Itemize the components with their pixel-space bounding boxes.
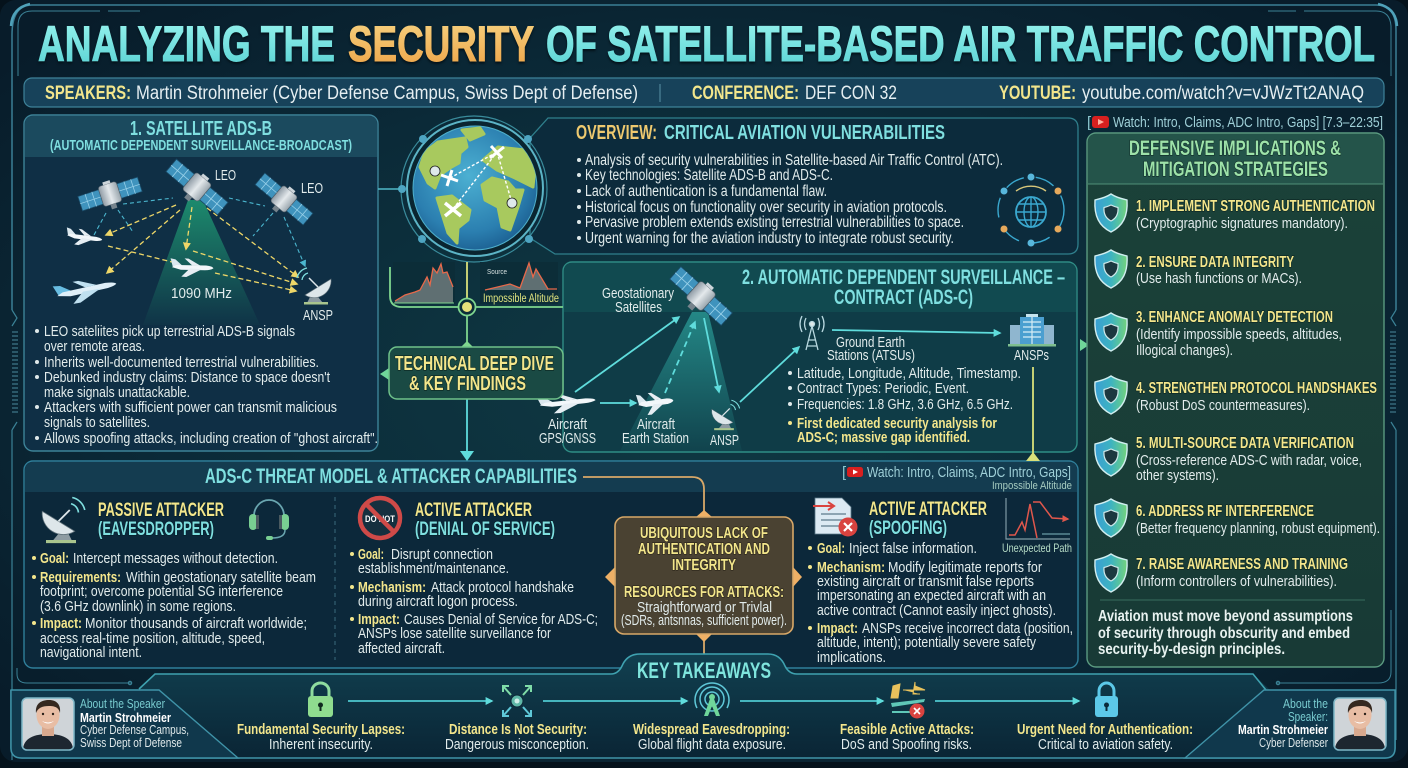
label: aircraft earth station: Aircraft [637, 417, 675, 433]
takeaway: widespread eavesdropping [633, 683, 790, 753]
mini chart: altitude spikes [393, 262, 455, 304]
chart: unexpected path [1002, 498, 1072, 555]
heading: active attacker DoS: ACTIVE ATTACKER [415, 500, 532, 521]
icon: ANSP dish [712, 400, 740, 430]
callout: technical deep dive [380, 341, 563, 399]
panel: 2 ADS-C [536, 262, 1077, 452]
panel: 1 satellite ADS-B [24, 115, 378, 451]
text: satellite ADS-B bullets: Attackers with sufficient power can transmit malicious [44, 400, 337, 416]
label: geostationary satellites: Geostationary [602, 286, 675, 302]
text: DoS bullets: Causes Denial of Service for ADS-C; [404, 612, 598, 628]
item 5: multi-source verification: (Cross-reference ADS-C with radar, voice, [1136, 453, 1362, 469]
text: spoofing bullets: Mechanism: [817, 560, 885, 576]
callout: ubiquitous lack of authentication: (SDRs, antsnnas, sufficient power). [621, 613, 787, 629]
takeaway: fundamental security lapses: Inherent insecurity. [269, 736, 373, 753]
icon: plane upper [64, 227, 103, 249]
text: DoS bullets: Disrupt connection [391, 547, 493, 563]
text: passive attacker bullets [32, 551, 316, 661]
takeaway: fundamental security lapses: Fundamental Security Lapses: [237, 721, 405, 738]
text: overview bullets: Urgent warning for the aviation industry to integrate robust security. [585, 230, 954, 247]
text: speaker bio: Swiss Dept of Defense [80, 735, 182, 750]
label: LEO right: LEO [301, 181, 323, 197]
heading: active attacker spoofing: (SPOOFING) [869, 518, 947, 539]
column: spoofing [808, 464, 1073, 666]
callout: ubiquitous lack of authentication: Straightforward or Trivlal [637, 600, 772, 616]
heading: active attacker DoS: (DENIAL OF SERVICE) [415, 519, 555, 540]
takeaway: urgent need for authentication: Critical to aviation safety. [1038, 736, 1173, 753]
title: SECURITY [348, 16, 534, 72]
text: passive attacker bullets: Intercept messages without detection. [73, 551, 278, 567]
title: ANALYZING THE [38, 16, 335, 72]
text: satellite ADS-B bullets [35, 324, 378, 447]
item 1: strong authentication [1095, 194, 1375, 232]
callout: ubiquitous lack of authentication [605, 510, 802, 642]
label: ANSPs: ANSPs [1014, 348, 1049, 364]
takeaway: feasible active attacks: Feasible Active Attacks: [840, 721, 974, 738]
heading: defensive [1129, 137, 1341, 181]
icon: headset [249, 500, 289, 540]
panel: about the speaker left [11, 690, 238, 758]
heading: threat model: ADS-C THREAT MODEL & ATTACKER CAPABILITIES [205, 465, 577, 488]
icon: geostationary satellite [664, 262, 737, 332]
heading: key takeaways: KEY TAKEAWAYS [637, 658, 771, 683]
label: aircraft GPS: GPS/GNSS [539, 431, 596, 447]
takeaway: urgent need for authentication: Urgent Need for Authentication: [1017, 721, 1193, 738]
item 5: multi-source verification: other systems). [1136, 468, 1219, 484]
text: satellite ADS-B bullets: Allows spoofing attacks, including creation of "ghost aircraft". [44, 431, 378, 447]
chart: unexpected path: Unexpected Path [1002, 541, 1072, 555]
text: overview bullets: Lack of authentication is a fundamental flaw. [585, 183, 827, 200]
item 3: anomaly detection: Illogical changes). [1136, 343, 1233, 359]
item 3: anomaly detection: (Identify impossible speeds, altitudes, [1136, 327, 1342, 343]
icon: aircraft earth station [636, 391, 674, 416]
text: passive attacker bullets: Within geostationary satellite beam [126, 570, 316, 586]
text: spoofing bullets: impersonating an expected aircraft with an [817, 588, 1046, 604]
takeaway: fundamental security lapses [237, 683, 405, 753]
heading: defensive: MITIGATION STRATEGIES [1143, 158, 1328, 181]
text: passive attacker bullets: Requirements: [40, 570, 121, 586]
text: ADS-C bullets: ADS-C; massive gap identified. [797, 430, 970, 446]
panel: overview [530, 118, 1078, 254]
label: ground earth stations: Stations (ATSUs) [827, 348, 915, 364]
text: overview bullets: Pervasive problem extends existing terrestrial vulnerabilities to space. [585, 214, 964, 231]
heading: passive attacker: PASSIVE ATTACKER [98, 500, 224, 521]
icon: satellite dish [42, 498, 85, 543]
heading: ADS-C: 2. AUTOMATIC DEPENDENT SURVEILLANCE – [742, 266, 1065, 289]
label: ANSP: ANSP [303, 308, 333, 324]
icon: spoofed document [813, 498, 858, 536]
heading: overview: OVERVIEW: [576, 122, 657, 144]
takeaway: widespread eavesdropping: Widespread Eavesdropping: [633, 721, 790, 738]
item 7: awareness and training [1095, 554, 1348, 592]
item 7: awareness and training: (Inform controllers of vulnerabilities). [1136, 574, 1337, 590]
header info bar: CONFERENCE: [692, 83, 799, 104]
takeaway: distance is not security [445, 686, 589, 753]
item 4: protocol handshakes [1095, 376, 1377, 414]
text: spoofing bullets: existing aircraft or transmit false reports [817, 574, 1034, 590]
panel: defensive implications [1087, 133, 1384, 667]
icon: ANSPs building [1008, 314, 1056, 346]
takeaway: urgent need for authentication [1017, 683, 1193, 753]
text: satellite ADS-B bullets: Inherits well-documented terrestrial vulnerabilities. [44, 355, 319, 371]
text: spoofing bullets: Inject false information. [849, 541, 977, 557]
item 2: data integrity: 2. ENSURE DATA INTEGRITY [1136, 254, 1294, 271]
item 3: anomaly detection: 3. ENHANCE ANOMALY DETECTION [1136, 309, 1333, 326]
heading: satellite ADS-B [50, 118, 352, 154]
icon: plane lower [53, 274, 118, 307]
text: passive attacker bullets: footprint; overcome potential SG interference [40, 584, 283, 600]
panel: ADS-C threat model [24, 461, 1078, 668]
text: passive attacker bullets: access real-time position, altitude, speed, [40, 631, 265, 647]
mini chart: impossible altitude: Impossible Altitude [483, 293, 559, 305]
text: passive attacker bullets: navigational intent. [40, 645, 142, 661]
text: speaker bio: Speaker: [1288, 709, 1328, 724]
item 6: RF interference [1095, 499, 1380, 537]
heading: ADS-C: CONTRACT (ADS-C) [834, 286, 973, 309]
icon: ground tower [800, 316, 824, 350]
label: impossible altitude: Impossible Altitude [992, 480, 1072, 492]
header info bar: SPEAKERS: [45, 83, 131, 104]
band: key takeaways [11, 654, 1395, 758]
text: spoofing bullets: ANSPs receive incorrect data (position, [862, 621, 1073, 637]
text: speaker bio [1238, 696, 1329, 750]
text: satellite ADS-B bullets: signals to satellites. [44, 415, 150, 431]
heading: overview [576, 122, 945, 144]
text: overview bullets: Analysis of security vulnerabilities in Satellite-based Air Traffic Control (ATC). [585, 152, 1003, 169]
label: aircraft GPS: Aircraft [548, 417, 587, 433]
text: DoS bullets: Impact: [358, 612, 400, 628]
text: passive attacker bullets: Impact: [40, 616, 82, 632]
text: spoofing bullets: active contract (Cannot easily inject ghosts). [817, 603, 1056, 619]
heading: passive attacker: (EAVESDROPPER) [98, 519, 214, 540]
label: geostationary satellites: Satellites [615, 300, 662, 316]
text: satellite ADS-B bullets: over remote areas. [44, 339, 145, 355]
header info bar: DEF CON 32 [805, 83, 897, 104]
heading: passive attacker [98, 500, 224, 540]
text: speaker bio: Cyber Defenser [1259, 735, 1329, 750]
photo: speaker [22, 698, 74, 750]
text: satellite ADS-B bullets: LEO sateliites pick up terrestrial ADS-B signals [44, 324, 295, 340]
connector lines [378, 189, 1033, 656]
heading: overview: CRITICAL AVIATION VULNERABILITIES [664, 122, 945, 144]
text: speaker bio: About the [1283, 696, 1328, 711]
text: ADS-C bullets: First dedicated security analysis for [797, 416, 997, 432]
header info bar [24, 78, 1384, 107]
text: passive attacker bullets: (3.6 GHz downlink) in some regions. [40, 599, 236, 615]
diagram: LEO satellites to ANSP [53, 154, 333, 325]
item 5: multi-source verification [1095, 435, 1362, 484]
heading: active attacker spoofing: ACTIVE ATTACKER [869, 499, 987, 520]
text: speaker bio: Martin Strohmeier [80, 710, 171, 725]
icon: satellite right [250, 169, 317, 231]
icon: do not sign [360, 498, 400, 538]
text: satellite ADS-B bullets: Debunked industry claims: Distance to space doesn't [44, 370, 330, 386]
watch link: defensive: [ [1087, 114, 1092, 131]
icon: satellite left [76, 172, 145, 218]
label: ANSP: ANSP [710, 433, 739, 449]
takeaway: feasible active attacks [840, 682, 974, 753]
heading: satellite ADS-B: (AUTOMATIC DEPENDENT SURVEILLANCE-BROADCAST) [50, 138, 352, 154]
text: speaker bio: Cyber Defense Campus, [80, 722, 189, 737]
text: ADS-C bullets: Frequencies: 1.8 GHz, 3.6 GHz, 6.5 GHz. [797, 397, 1013, 413]
item 3: anomaly detection [1095, 309, 1342, 359]
header info bar: youtube.com/watch?v=vJWzTt2ANAQ [1082, 83, 1364, 104]
text: overview bullets: Historical focus on functionality over security in aviation protocols. [585, 199, 947, 216]
arrow: down to threat model [460, 451, 474, 461]
watch link: [ [842, 464, 847, 481]
text: spoofing bullets [808, 541, 1073, 666]
text: closing statement [1098, 608, 1353, 658]
item 2: data integrity [1095, 250, 1302, 288]
icon: network globe [998, 174, 1064, 246]
label: ground earth stations [827, 335, 915, 364]
callout: ubiquitous lack of authentication: AUTHENTICATION AND [638, 541, 770, 558]
column: denial of service [350, 498, 598, 657]
text: overview bullets [577, 152, 1003, 247]
takeaway: widespread eavesdropping: Global flight data exposure. [638, 736, 786, 753]
label: aircraft GPS [539, 417, 596, 447]
icon: ANSP dish [297, 268, 331, 304]
label: aircraft earth station [622, 417, 689, 447]
text: DoS bullets: ANSPs lose satellite surveillance for [358, 626, 551, 642]
text: closing statement: of security through obscurity and embed [1098, 625, 1350, 642]
callout: technical deep dive: & KEY FINDINGS [409, 373, 526, 395]
text: closing statement: Aviation must move beyond assumptions [1098, 608, 1353, 625]
mini chart: impossible altitude: Source [487, 269, 507, 276]
text: speaker bio: Martin Strohmeier [1238, 722, 1328, 737]
callout: ubiquitous lack of authentication: RESOURCES FOR ATTACKS: [624, 584, 784, 601]
takeaway: distance is not security: Dangerous misconception. [445, 736, 589, 753]
label: geostationary satellites [602, 286, 675, 316]
text: DoS bullets [350, 547, 598, 657]
text: DoS bullets: Goal: [358, 547, 384, 563]
header info bar: Martin Strohmeier (Cyber Defense Campus, Swiss Dept of Defense) [136, 83, 638, 104]
label: 1090 MHz: 1090 MHz [171, 286, 232, 302]
heading: active attacker DoS [415, 500, 555, 540]
item 4: protocol handshakes: (Robust DoS countermeasures). [1136, 398, 1310, 414]
text: DoS bullets: Mechanism: [358, 580, 426, 596]
label: LEO: LEO [215, 168, 236, 184]
arrow: to defensive panel [1080, 339, 1089, 351]
text: closing statement: security-by-design principles. [1098, 641, 1285, 658]
arrows between takeaways [348, 700, 1079, 702]
header info bar: YOUTUBE: [999, 83, 1076, 104]
text: spoofing bullets: Goal: [817, 541, 845, 557]
label: aircraft earth station: Earth Station [622, 431, 689, 447]
heading: active attacker spoofing [869, 499, 987, 539]
takeaway: distance is not security: Distance Is Not Security: [449, 721, 587, 738]
text: ADS-C bullets [788, 366, 1021, 446]
text: spoofing bullets: implications. [817, 650, 886, 666]
text: speaker bio: About the Speaker [80, 696, 166, 711]
text: ADS-C bullets: Contract Types: Periodic, Event. [797, 381, 969, 397]
icon: satellite center [161, 154, 232, 221]
title [38, 16, 1375, 72]
callout: ubiquitous lack of authentication: INTEGRITY [672, 557, 737, 574]
watch link: Watch: Intro, Claims, ADC Intro, Gaps] [867, 464, 1071, 481]
icon: do not sign: DO NOT [365, 514, 395, 525]
callout: ubiquitous lack of authentication: UBIQUITOUS LACK OF [640, 525, 768, 542]
text: passive attacker bullets: Monitor thousands of aircraft worldwide; [85, 616, 307, 632]
text: spoofing bullets: Modify legitimate reports for [888, 560, 1042, 576]
icon: plane center [169, 257, 214, 279]
text: spoofing bullets: Impact: [817, 621, 858, 637]
item 2: data integrity: (Use hash functions or MACs). [1136, 271, 1302, 287]
arrow: up from threat model to ADS-C [1026, 452, 1040, 461]
text: DoS bullets: affected aircraft. [358, 641, 445, 657]
column: passive attacker [32, 498, 316, 661]
item 6: RF interference: 6. ADDRESS RF INTERFERENCE [1136, 503, 1314, 520]
globe [398, 116, 547, 262]
item 1: strong authentication: (Cryptographic signatures mandatory). [1136, 216, 1348, 232]
label: ground earth stations: Ground Earth [836, 335, 905, 351]
text: DoS bullets: establishment/maintenance. [358, 561, 509, 577]
diagram: ADS-C data flow [536, 262, 1056, 451]
text: spoofing bullets: altitude, intent); potentially severe safety [817, 635, 1037, 651]
panel: about the speaker right [1185, 690, 1395, 758]
callout: technical deep dive: TECHNICAL DEEP DIVE [395, 353, 554, 375]
heading: satellite ADS-B: 1. SATELLITE ADS-B [130, 118, 272, 140]
takeaway: feasible active attacks: DoS and Spoofing risks. [841, 736, 972, 753]
icon: aircraft [536, 392, 596, 415]
text: speaker bio [80, 696, 189, 750]
text: overview bullets: Key technologies: Satellite ADS-B and ADS-C. [585, 167, 833, 184]
text: DoS bullets: during aircraft logon process. [358, 594, 518, 610]
photo: speaker [1334, 698, 1386, 750]
node: junction [458, 298, 476, 316]
text: DoS bullets: Attack protocol handshake [431, 580, 574, 596]
text: ADS-C bullets: Latitude, Longitude, Altitude, Timestamp. [797, 366, 1021, 382]
mini chart: impossible altitude [480, 262, 559, 305]
text: passive attacker bullets: Goal: [40, 551, 69, 567]
text: satellite ADS-B bullets: make signals unattackable. [44, 385, 190, 401]
heading: ADS-C [742, 266, 1065, 309]
